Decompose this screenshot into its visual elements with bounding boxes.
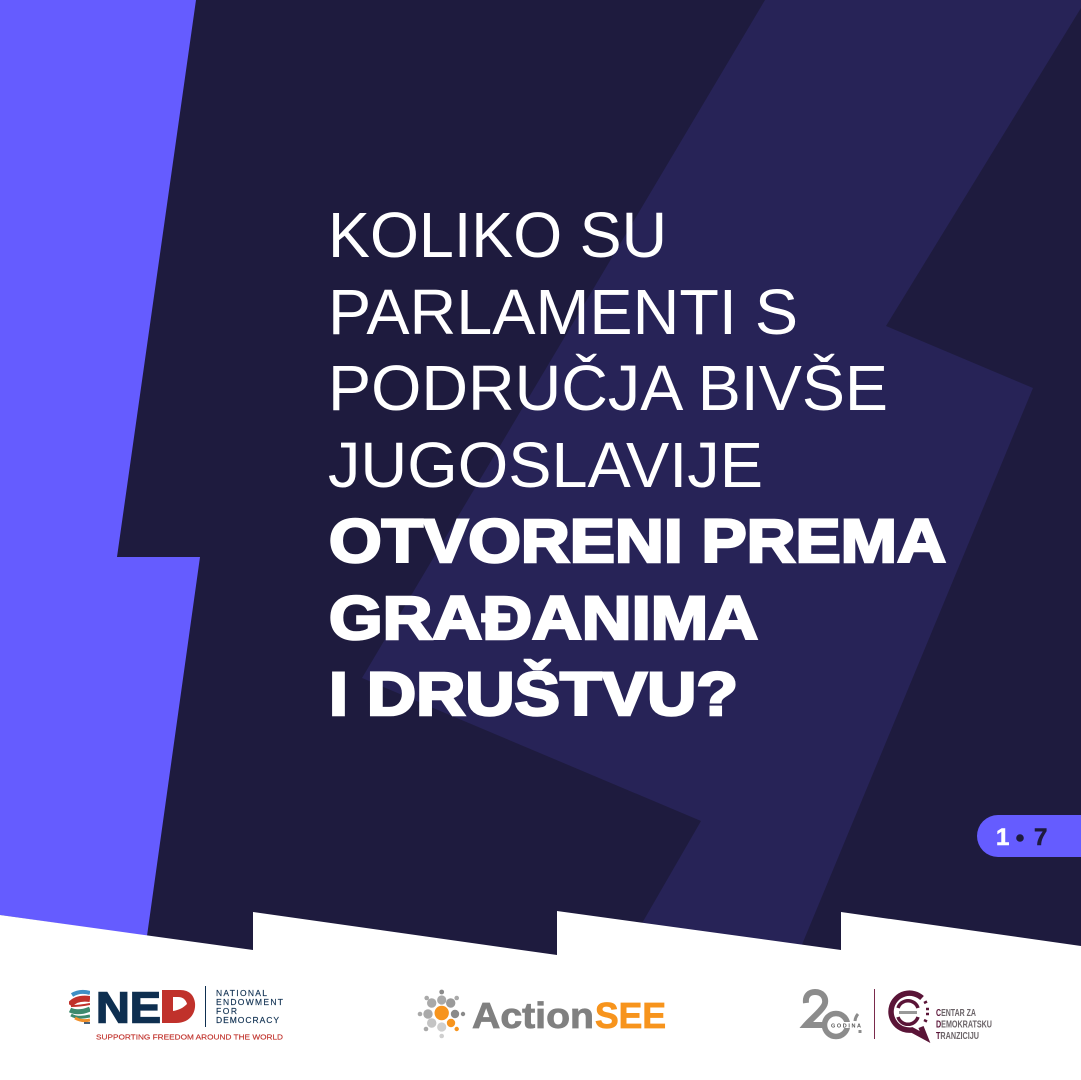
logo: ActionSEE: Action — [472, 995, 594, 1036]
logo: NED: NATIONAL — [216, 988, 267, 998]
logo: CDT 20 godina: DEMOKRATSKU — [936, 1020, 992, 1030]
title: OTVORENI PREMA — [329, 507, 946, 575]
title: I DRUŠTVU? — [329, 660, 738, 728]
logo: CDT 20 godina — [806, 989, 992, 1042]
logo: CDT 20 godina: CENTAR ZA — [936, 1008, 976, 1019]
logo: NED: NE — [96, 984, 161, 1032]
logo: CDT 20 godina: TRANZICIJU — [936, 1031, 979, 1042]
logo: CDT 20 godina: GODINA — [831, 1024, 861, 1030]
page counter badge — [977, 815, 1081, 857]
logo: NED: ENDOWMENT — [216, 997, 283, 1007]
title: PARLAMENTI S — [328, 276, 798, 348]
logo: NED: DEMOCRACY — [216, 1015, 279, 1025]
logo: NED: SUPPORTING FREEDOM AROUND THE WORLD — [96, 1032, 284, 1042]
title: KOLIKO SU — [328, 199, 667, 271]
title — [328, 199, 946, 728]
page counter badge: 7 — [1034, 824, 1047, 851]
logo: NED — [70, 984, 284, 1042]
logo: ActionSEE: SEE — [595, 995, 666, 1036]
purple left shape — [0, 0, 200, 936]
logo: ActionSEE — [418, 990, 666, 1038]
page counter badge: 1 — [996, 824, 1009, 851]
title: PODRUČJA BIVŠE — [328, 352, 888, 424]
title: GRAĐANIMA — [329, 584, 758, 652]
white footer band — [0, 911, 1081, 1080]
logo: NED: FOR — [216, 1006, 237, 1016]
lighter indigo lightning shape — [362, 0, 1081, 947]
title: JUGOSLAVIJE — [328, 429, 763, 501]
